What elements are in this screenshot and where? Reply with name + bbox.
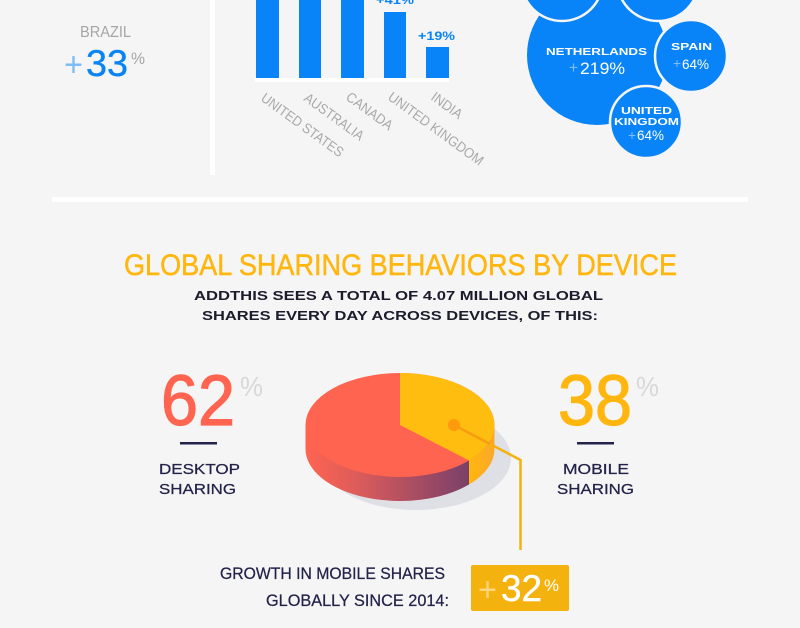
stat: Brazil growth: + — [64, 46, 83, 84]
stat: desktop sharing: DESKTOP — [159, 461, 240, 478]
callout: mobile growth text — [220, 564, 449, 610]
stat: Brazil growth: 33 — [86, 43, 128, 84]
callout: mobile growth text: GLOBALLY SINCE 2014: — [266, 591, 449, 610]
stat: desktop sharing — [159, 362, 263, 498]
intro text — [194, 288, 603, 323]
bubble chart: growth by country — [521, 0, 727, 158]
intro text: SHARES EVERY DAY ACROSS DEVICES, OF THIS: — [202, 308, 598, 323]
bar chart: growth by country: +19% — [418, 31, 455, 43]
bar chart: growth by country: UNITED KINGDOM — [385, 88, 487, 168]
bar chart: growth by country: CANADA — [343, 88, 397, 134]
stat: desktop sharing: % — [240, 371, 263, 402]
callout: mobile growth value: 32 — [501, 568, 542, 609]
bar chart: growth by country: UNITED STATES — [258, 89, 347, 160]
bar chart: growth by country — [255, 0, 487, 168]
bubble chart: growth by country: UNITED — [621, 105, 673, 117]
stat: mobile sharing: MOBILE — [563, 461, 629, 478]
bubble chart: growth by country: 64% — [637, 127, 664, 143]
bubble chart: growth by country: SPAIN — [671, 41, 712, 53]
bubble chart: growth by country: 64% — [682, 56, 709, 72]
bubble chart: growth by country: NETHERLANDS — [546, 47, 647, 58]
stat: mobile sharing — [557, 362, 659, 498]
stat: desktop sharing: 62 — [161, 362, 235, 441]
callout: mobile growth value: + — [478, 571, 497, 609]
intro text: ADDTHIS SEES A TOTAL OF 4.07 MILLION GLOBAL — [194, 288, 603, 303]
bubble chart: growth by country: + — [569, 58, 578, 77]
pie chart: desktop vs mobile — [306, 373, 511, 510]
bubble chart: growth by country: 219% — [580, 59, 625, 78]
section heading: GLOBAL SHARING BEHAVIORS BY DEVICE — [124, 249, 677, 282]
stat: mobile sharing: % — [636, 371, 659, 402]
bubble chart: growth by country: + — [628, 127, 636, 143]
leader line — [454, 425, 520, 550]
bar chart: growth by country: INDIA — [428, 88, 466, 122]
stat: desktop sharing: SHARING — [159, 481, 236, 498]
bubble chart: growth by country: KINGDOM — [614, 116, 679, 128]
callout: mobile growth text: GROWTH IN MOBILE SHARES — [220, 564, 445, 583]
bar chart: growth by country: AUSTRALIA — [301, 89, 368, 144]
callout: mobile growth value: % — [544, 576, 559, 595]
stat: Brazil growth — [64, 24, 145, 84]
callout: mobile growth value — [471, 565, 569, 611]
stat: mobile sharing: SHARING — [557, 481, 634, 498]
stat: mobile sharing: 38 — [558, 362, 632, 441]
stat: Brazil growth: BRAZIL — [80, 24, 131, 41]
bubble chart: growth by country: + — [673, 55, 681, 71]
stat: Brazil growth: % — [131, 49, 145, 68]
